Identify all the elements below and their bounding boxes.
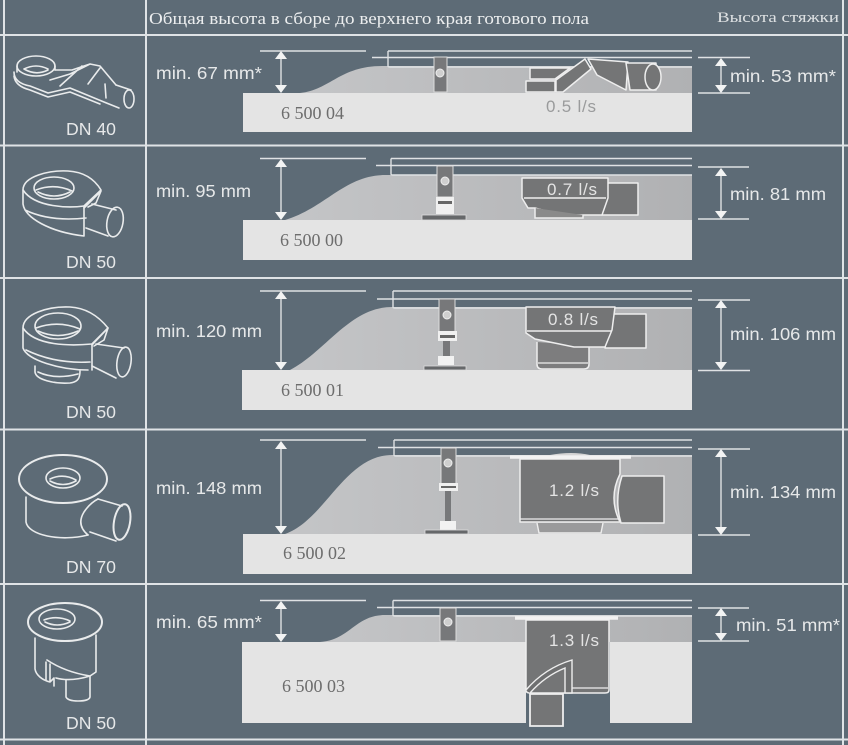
label: DN 50: DN 50 (66, 713, 116, 733)
support foot (424, 299, 466, 370)
icon: DN 50 drain (23, 307, 133, 383)
screed fill (300, 66, 692, 93)
total height dimension (260, 440, 366, 534)
channel rail (378, 440, 692, 456)
total height dimension (260, 51, 366, 93)
row 1: DN 40 (14, 51, 836, 139)
flow rate: 0.7 l/s (547, 180, 597, 199)
article number: 6 500 00 (280, 230, 343, 250)
support foot (425, 448, 468, 534)
total height dimension (260, 291, 366, 370)
screed fill (285, 175, 692, 220)
floor slab (243, 93, 692, 132)
label: DN 50: DN 50 (66, 252, 116, 272)
icon: DN 40 drain (14, 56, 134, 108)
floor slab (243, 220, 692, 260)
article number: 6 500 04 (281, 103, 344, 123)
screed fill (320, 615, 692, 642)
drain section (510, 453, 664, 533)
total height dimension (260, 600, 366, 642)
flow rate: 0.5 l/s (546, 97, 596, 116)
flow rate: 0.8 l/s (548, 310, 598, 329)
label: total height: min. 120 mm (156, 321, 262, 341)
label: total height: min. 95 mm (156, 181, 251, 201)
heading: screed height: Высота стяжки (717, 10, 839, 26)
label: total height: min. 148 mm (156, 478, 262, 498)
label: total height: min. 67 mm* (156, 63, 262, 83)
label: screed height: min. 134 mm (730, 482, 836, 502)
screed height dimension (698, 608, 749, 641)
icon: DN 50 drain (28, 603, 102, 701)
drain section (526, 59, 661, 92)
support foot (440, 608, 456, 641)
icon: DN 70 drain (19, 455, 133, 541)
row 4: DN 70 (19, 440, 836, 577)
label: DN 70: DN 70 (66, 557, 116, 577)
screed height dimension (698, 58, 750, 93)
label: screed height: min. 81 mm (730, 184, 826, 204)
channel rail (376, 158, 692, 175)
heading: total height: Общая высота в сборе до верхнего края готового пола (149, 9, 590, 28)
total height dimension (260, 158, 366, 220)
label: total height: min. 65 mm* (156, 612, 262, 632)
flow rate: 1.2 l/s (549, 481, 599, 500)
drain section (515, 618, 618, 726)
row 2: DN 50 (23, 158, 826, 272)
screed height dimension (698, 300, 750, 370)
channel rail (372, 51, 692, 67)
article number: 6 500 01 (281, 380, 344, 400)
channel rail (377, 600, 692, 616)
screed height dimension (698, 449, 750, 535)
drain section (522, 178, 638, 218)
label: DN 50: DN 50 (66, 402, 116, 422)
row 5: DN 50 (28, 600, 840, 733)
label: screed height: min. 51 mm* (736, 615, 840, 635)
label: screed height: min. 106 mm (730, 324, 836, 344)
flow rate: 1.3 l/s (549, 631, 599, 650)
floor slab (243, 534, 692, 574)
screed fill (290, 307, 692, 370)
support foot (422, 166, 466, 220)
row 3: DN 50 (23, 291, 836, 422)
floor slab (242, 642, 692, 723)
icon: DN 50 drain (23, 171, 125, 238)
floor slab (242, 370, 692, 410)
drain section (526, 307, 646, 369)
screed height dimension (698, 167, 749, 219)
screed fill (285, 455, 692, 534)
channel rail (377, 291, 692, 308)
article number: 6 500 02 (283, 543, 346, 563)
label: screed height: min. 53 mm* (730, 66, 836, 86)
article number: 6 500 03 (282, 676, 345, 696)
label: DN 40: DN 40 (66, 119, 116, 139)
support foot (434, 57, 447, 92)
